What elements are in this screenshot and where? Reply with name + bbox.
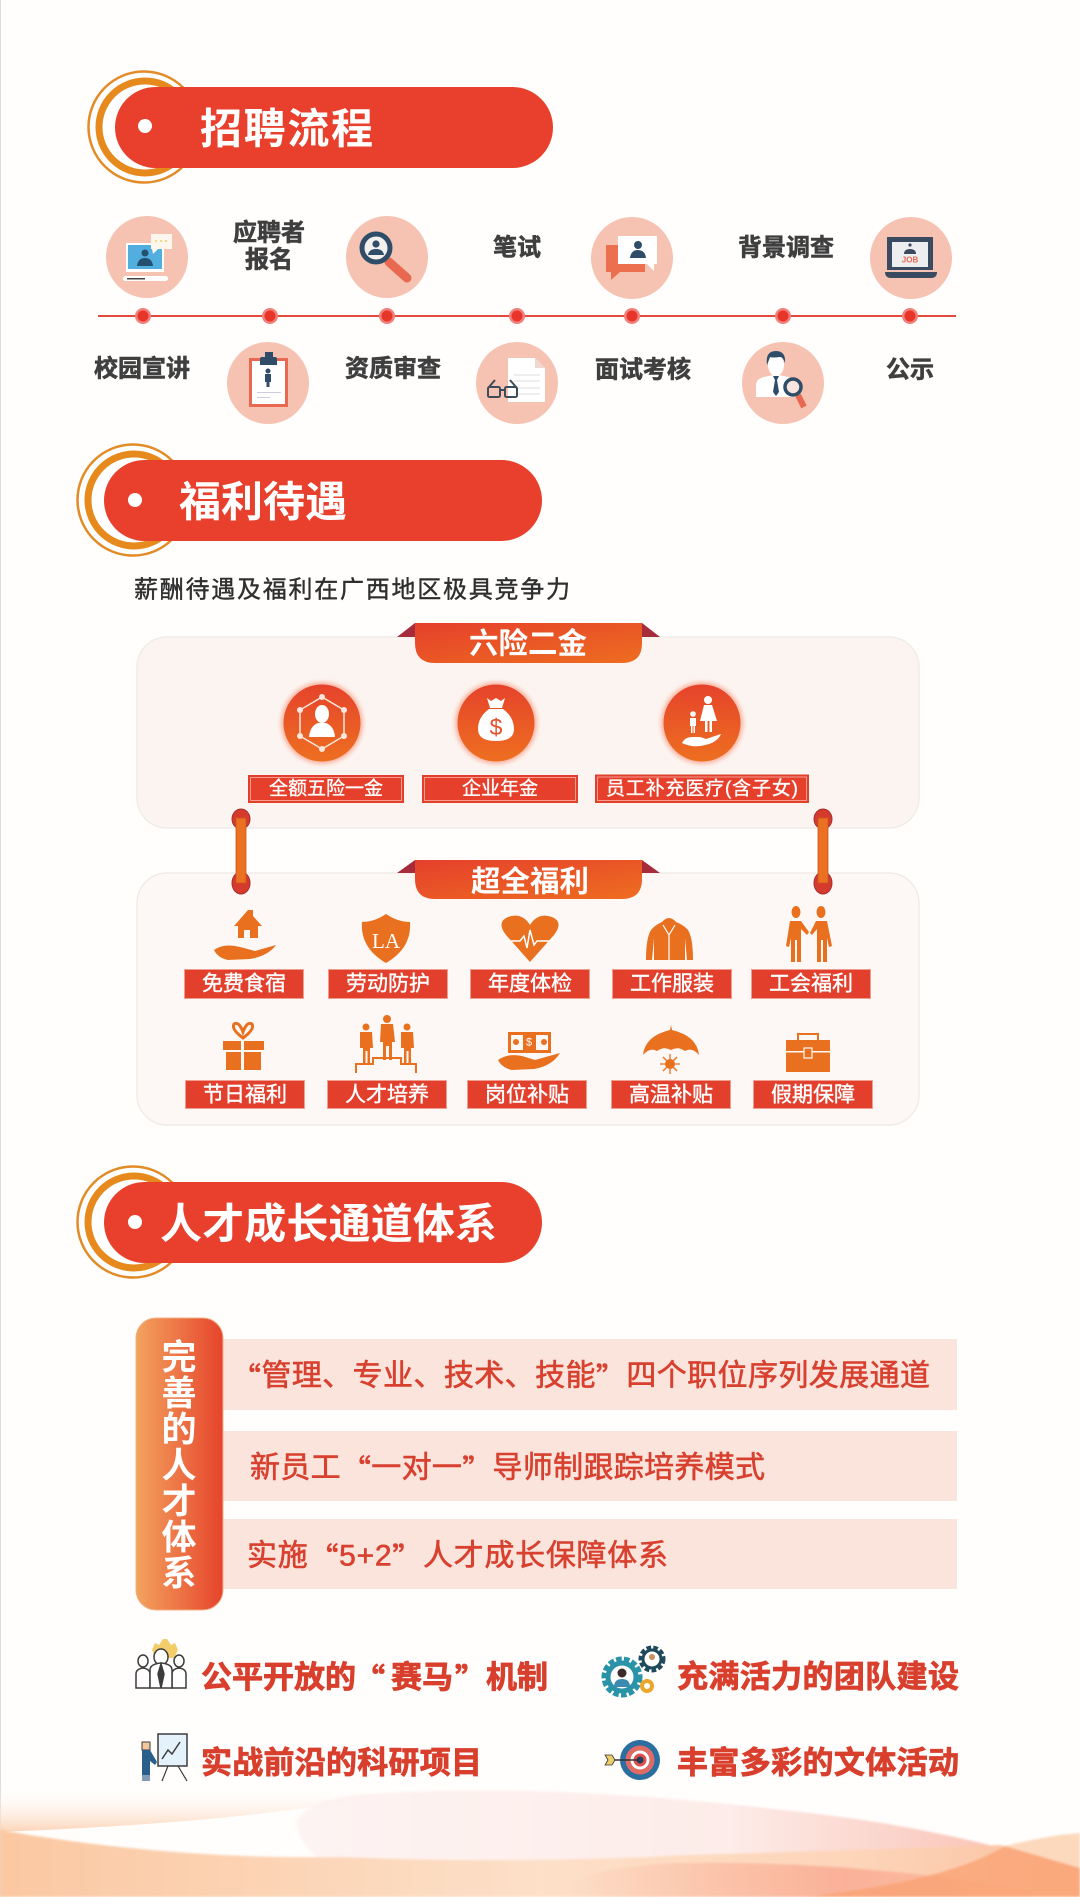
feature: 丰富多彩的文体活动 <box>605 1740 959 1780</box>
ribbon heading <box>397 860 660 899</box>
bottom wave decoration <box>0 1790 1080 1897</box>
vertical heading: 完善的人才体系: 的 <box>161 1410 197 1450</box>
text: 充满活力的团队建设 <box>677 1660 959 1694</box>
icon: presentation screen <box>106 216 188 298</box>
feature: 公平开放的赛马机制 <box>136 1639 548 1700</box>
benefit: 企业年金: $ <box>490 714 503 740</box>
section header: 人才成长通道体系: 人才成长通道体系 <box>160 1200 497 1248</box>
benefit: 企业年金: 企业年金 <box>462 778 538 800</box>
ribbon heading <box>397 623 660 663</box>
ribbon heading: 六险二金 <box>469 628 587 660</box>
vertical heading: 完善的人才体系: 才 <box>161 1482 197 1522</box>
step 6: 背景调查 <box>738 234 834 424</box>
benefit: 假期保障: 假期保障 <box>771 1084 855 1106</box>
section header: 福利待遇 <box>78 444 542 556</box>
icon: clipboard <box>227 342 309 424</box>
label: 报名 <box>245 246 293 274</box>
feature: 充满活力的团队建设 <box>606 1649 959 1694</box>
benefit: 工会福利: 工会福利 <box>769 972 853 996</box>
row 1 <box>223 1339 957 1410</box>
step 2: 应聘者报名 <box>227 220 309 424</box>
benefit: 工作服装: 工作服装 <box>630 972 714 996</box>
text: ” <box>455 1654 486 1700</box>
benefit: 假期保障 <box>754 1034 872 1108</box>
row 3: 实施“5+2”人才成长保障体系 <box>247 1534 668 1578</box>
icon: interview chat bubbles <box>591 217 673 299</box>
benefit: 劳动防护 <box>328 914 448 998</box>
label: 校园宣讲 <box>94 356 190 382</box>
label: 资质审查 <box>345 356 441 382</box>
benefit: 岗位补贴 <box>468 1032 586 1108</box>
connector: left <box>232 809 250 894</box>
icon: magnifier <box>346 216 428 298</box>
feature: 实战前沿的科研项目 <box>142 1734 482 1781</box>
label: 公示 <box>886 356 934 384</box>
vertical heading: 完善的人才体系: 人 <box>161 1446 197 1486</box>
icon: laptop JOB: JOB <box>902 256 918 264</box>
talent system rows <box>223 1339 957 1589</box>
benefit: 员工补充医疗 <box>596 682 808 802</box>
benefit: 节日福利: 节日福利 <box>203 1084 287 1106</box>
process timeline <box>98 308 956 324</box>
text: “ <box>354 1654 385 1700</box>
label: 笔试 <box>493 234 541 262</box>
icon: dartboard <box>605 1740 660 1780</box>
icon: doctor with magnifier <box>742 342 824 424</box>
row 1: “管理、专业、技术、技能”四个职位序列发展通道 <box>231 1354 930 1398</box>
section header: 招聘流程 <box>88 72 553 182</box>
label: 背景调查 <box>738 234 834 262</box>
benefit: 劳动防护: 劳动防护 <box>346 972 430 996</box>
benefit: 全额五险一金: 全额五险一金 <box>269 778 383 800</box>
text: 公平开放的 <box>201 1660 356 1694</box>
step 5: 面试考核 <box>591 217 691 384</box>
ribbon heading: 超全福利 <box>471 866 589 898</box>
step 7: 公示 <box>870 217 952 384</box>
vertical heading: 完善的人才体系 <box>136 1318 223 1610</box>
benefit: 人才培养: 人才培养 <box>345 1084 429 1106</box>
section header: 福利待遇: 福利待遇 <box>179 478 347 526</box>
panel: 六险二金 <box>137 623 919 828</box>
label: 面试考核 <box>595 356 691 384</box>
benefit: 免费食宿: 免费食宿 <box>202 972 286 996</box>
vertical heading: 完善的人才体系: 善 <box>161 1374 197 1414</box>
section header: 人才成长通道体系 <box>78 1166 542 1278</box>
label <box>233 220 305 274</box>
vertical heading: 完善的人才体系: 体 <box>161 1518 197 1558</box>
benefit: 年度体检: 年度体检 <box>488 972 572 996</box>
row 2: 新员工“一对一”导师制跟踪培养模式 <box>250 1446 765 1490</box>
panel: 超全福利 <box>137 860 919 1125</box>
row 2 <box>223 1431 957 1501</box>
section header: 招聘流程: 招聘流程 <box>200 106 373 152</box>
text: 赛马 <box>391 1660 453 1694</box>
vertical heading: 完善的人才体系: 系 <box>161 1554 197 1594</box>
step 1: 校园宣讲 <box>94 216 190 382</box>
benefit: 岗位补贴: 岗位补贴 <box>485 1084 569 1106</box>
vertical heading: 完善的人才体系: 完 <box>161 1338 197 1378</box>
step 4: 笔试 <box>476 234 558 424</box>
text: 实战前沿的科研项目 <box>201 1746 482 1780</box>
icon: laptop JOB <box>870 217 952 299</box>
icon: presenter at chart <box>142 1734 187 1781</box>
benefit: 高温补贴: 高温补贴 <box>629 1084 713 1106</box>
benefit: 全额五险一金 <box>248 682 404 802</box>
benefit: 年度体检 <box>470 916 590 998</box>
benefit: 免费食宿 <box>184 910 304 998</box>
benefit: 节日福利 <box>186 1023 304 1108</box>
label: 应聘者 <box>233 220 305 246</box>
icon: team with gear <box>136 1639 186 1688</box>
benefit: 人才培养 <box>328 1015 446 1108</box>
benefit: 工会福利 <box>752 906 870 998</box>
benefit: 高温补贴 <box>612 1025 730 1108</box>
benefit: 员工补充医疗: 员工补充医疗(含子女) <box>606 778 798 800</box>
icon: document and glasses <box>476 342 558 424</box>
step 3: 资质审查 <box>345 216 441 382</box>
text: 机制 <box>486 1660 548 1694</box>
text: 丰富多彩的文体活动 <box>677 1746 959 1780</box>
connector: right <box>814 809 832 894</box>
benefit: 工作服装 <box>612 918 732 998</box>
intro text: 薪酬待遇及福利在广西地区极具竞争力 <box>134 576 570 604</box>
row 3 <box>223 1519 957 1589</box>
icon: gears and people <box>606 1649 662 1693</box>
benefit: 岗位补贴: $ <box>526 1036 532 1048</box>
benefit: 企业年金 <box>422 682 578 802</box>
benefit: 劳动防护: LA <box>372 929 401 953</box>
